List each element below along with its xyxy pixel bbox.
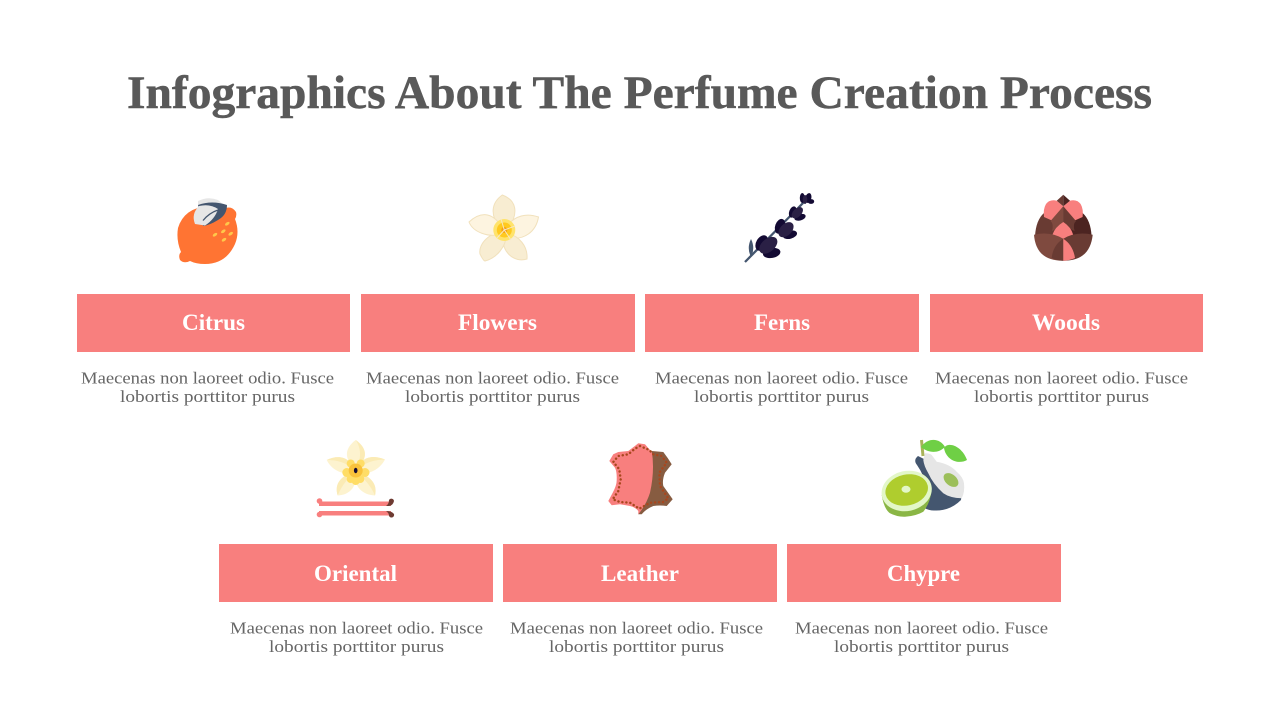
heading: ferns: Ferns [754,310,810,335]
text: oriental description: Maecenas non laoreet odio. Fusce [230,618,483,638]
heading: oriental [219,544,493,602]
panel: woods [930,195,1203,406]
panel: chypre [787,440,1061,656]
text: citrus description: Maecenas non laoreet odio. Fusce [81,368,334,388]
heading: citrus [77,294,350,352]
heading: citrus: Citrus [182,310,245,335]
heading: oriental: Oriental [314,561,397,586]
icon: bergamot fruit [878,440,967,517]
text: ferns description: lobortis porttitor purus [694,387,869,406]
heading: woods: Woods [1032,310,1100,335]
panel: oriental [219,440,493,656]
text: leather description [510,618,763,656]
text: citrus description [81,368,334,406]
panel: leather [503,443,777,656]
text: chypre description: lobortis porttitor purus [834,637,1009,656]
icon: orange [177,198,238,264]
panel: ferns [645,192,919,406]
heading: woods [930,294,1203,352]
heading: flowers [361,294,635,352]
text: oriental description: lobortis porttitor purus [269,637,444,656]
heading: leather [503,544,777,602]
heading: ferns [645,294,919,352]
panel: flowers [361,195,635,406]
text: leather description: lobortis porttitor purus [549,637,724,656]
title: Infographics About The Perfume Creation Process [127,67,1152,119]
heading: chypre [787,544,1061,602]
text: woods description: Maecenas non laoreet odio. Fusce [935,368,1188,388]
icon: vanilla flower and pods [317,440,394,518]
heading: leather: Leather [601,561,679,586]
icon: lavender sprig [745,192,814,262]
text: flowers description: lobortis porttitor purus [405,387,580,406]
heading: chypre: Chypre [887,561,960,586]
text: flowers description: Maecenas non laoreet odio. Fusce [366,368,619,388]
icon: pine cone [1034,195,1093,261]
text: ferns description: Maecenas non laoreet odio. Fusce [655,368,908,388]
text: leather description: Maecenas non laoreet odio. Fusce [510,618,763,638]
text: chypre description [795,618,1048,656]
panel: citrus [77,198,350,406]
icon: cream flower [469,195,538,261]
heading: flowers: Flowers [458,310,537,335]
text: woods description: lobortis porttitor purus [974,387,1149,406]
text: chypre description: Maecenas non laoreet odio. Fusce [795,618,1048,638]
text: flowers description [366,368,619,406]
text: woods description [935,368,1188,406]
text: ferns description [655,368,908,406]
text: citrus description: lobortis porttitor purus [120,387,295,406]
text: oriental description [230,618,483,656]
icon: leather hide [608,443,673,514]
